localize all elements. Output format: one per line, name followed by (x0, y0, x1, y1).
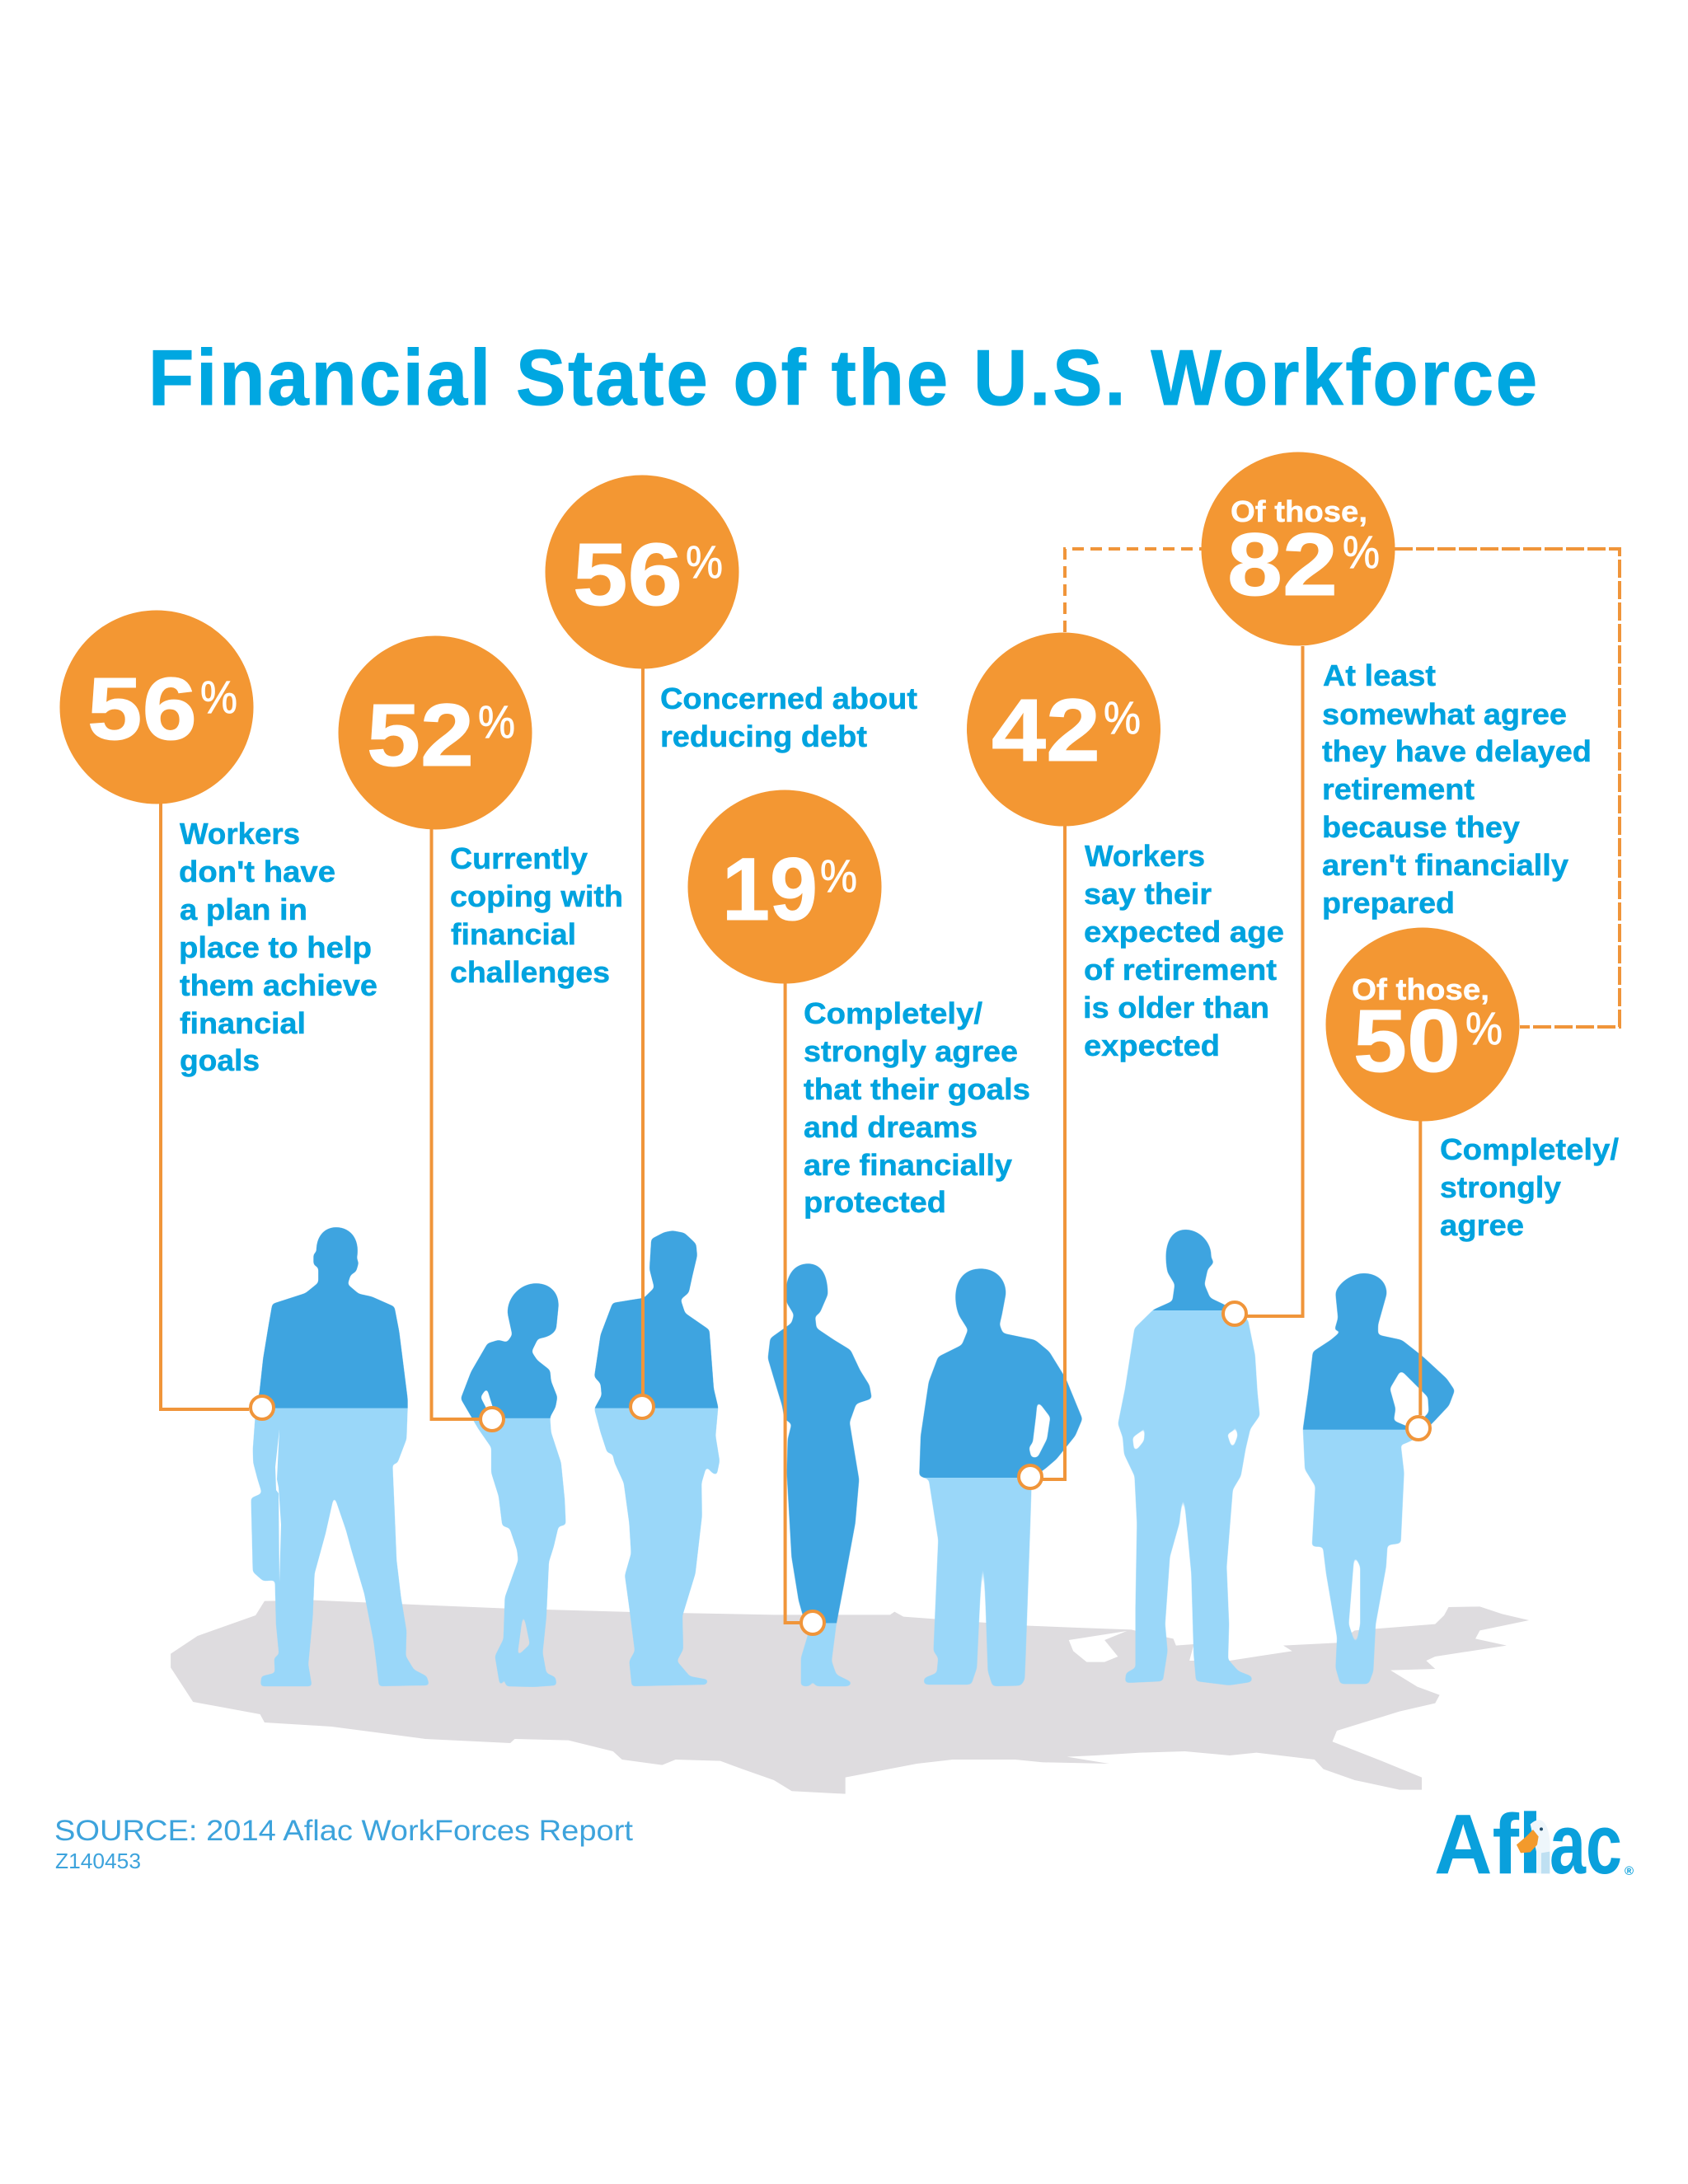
text: coping with challenges: coping with (450, 879, 623, 913)
stat circle: 56% no plan: % (200, 671, 237, 723)
stat circle: 42% (967, 633, 1160, 826)
text: delayed retirement: somewhat agree (1322, 697, 1567, 731)
text: completely agree: strongly (1440, 1170, 1561, 1204)
stat circle: of those 82%: % (1343, 526, 1380, 578)
stat circle: 56% no plan: 56 (87, 658, 197, 758)
text: delayed retirement: prepared (1322, 886, 1455, 920)
text: goals and dreams protected (804, 996, 1030, 1219)
text: goals and dreams protected: that their goals (804, 1072, 1030, 1106)
text: delayed retirement: retirement (1322, 772, 1475, 806)
map: United States (171, 1601, 1529, 1794)
stat circle: 42%: 42 (992, 680, 1100, 780)
text: workers without a plan: don't have (179, 855, 335, 888)
text: delayed retirement: they have delayed (1322, 734, 1592, 768)
text: goals and dreams protected: Completely/ (804, 996, 982, 1030)
stat circle: of those 50%: % (1465, 1002, 1503, 1054)
stat circle: 56% no plan (59, 610, 254, 804)
source note (54, 1815, 633, 1873)
logo: Aflac with duck (1434, 1797, 1634, 1891)
stat circle: of those 82% (1202, 452, 1395, 646)
logo: Aflac with duck: Af (1434, 1797, 1520, 1891)
stat circle: of those 82%: 82 (1227, 514, 1338, 614)
text: workers without a plan: financial (180, 1006, 306, 1040)
text: workers without a plan: them achieve (180, 968, 377, 1002)
text: older retirement age: say their (1084, 877, 1212, 911)
stat circle: 56% debt (546, 475, 738, 669)
dashed connector: 42% to 82% (1065, 549, 1202, 632)
source note: Z140453 (55, 1849, 141, 1873)
stat circle: of those 50%: 50 (1353, 991, 1461, 1090)
stat circle: 19%: 19 (722, 839, 818, 939)
person 6: man, 82% (1118, 1230, 1259, 1685)
stat circle: 52% coping (338, 636, 532, 829)
stat circle: 52% coping: % (478, 696, 515, 748)
text: workers without a plan (179, 817, 377, 1077)
dashed connector: 82% to 50% (1395, 549, 1620, 1027)
text: older retirement age: expected age (1084, 915, 1284, 949)
text: workers without a plan: goals (180, 1043, 260, 1077)
stat circle: of those 82%: Of those, (1231, 494, 1367, 528)
text: workers without a plan: a plan in (180, 893, 307, 926)
stat circle: 19% (687, 790, 882, 984)
icon: duck head (1517, 1811, 1550, 1873)
title: Financial State of the U.S. Workforce (148, 334, 1540, 422)
person 3: man, 56% (594, 1230, 720, 1686)
text: older retirement age: expected (1084, 1029, 1220, 1062)
text: goals and dreams protected: protected (804, 1185, 946, 1219)
stat circle: 19%: % (820, 850, 857, 902)
stat circle: 56% debt: 56 (573, 524, 682, 624)
text: goals and dreams protected: strongly agree (804, 1034, 1018, 1068)
text: coping with challenges: challenges (450, 955, 610, 989)
text: older retirement age: is older than (1083, 991, 1269, 1024)
marker dots (251, 1302, 1430, 1634)
text: coping with challenges: Currently (450, 841, 588, 875)
stat circle: 56% debt: % (686, 536, 723, 588)
stat circle: of those 50%: Of those, (1352, 972, 1489, 1006)
text: completely agree: agree (1440, 1208, 1524, 1242)
stat circle: 52% coping: 52 (367, 685, 474, 785)
text: delayed retirement: aren't financially (1322, 848, 1568, 882)
person 5: man, 42% (919, 1268, 1082, 1686)
stat circle: of those 50% (1325, 928, 1520, 1121)
text: completely agree: Completely/ (1440, 1132, 1619, 1166)
text: coping with challenges: financial (451, 917, 576, 951)
text: coping with challenges (450, 841, 623, 989)
person 1: man with briefcase, 56% (251, 1227, 429, 1686)
text: completely agree (1440, 1132, 1619, 1242)
logo: Aflac with duck: ac (1550, 1797, 1622, 1891)
text: reducing debt: reducing debt (660, 719, 867, 753)
text: workers without a plan: Workers (180, 817, 300, 851)
text: workers without a plan: place to help (179, 930, 372, 964)
person 2: woman, 52% (462, 1283, 565, 1687)
person 7: woman, 50% (1302, 1272, 1454, 1685)
arm gap (275, 1429, 281, 1582)
text: delayed retirement: At least (1323, 658, 1436, 692)
text: reducing debt: Concerned about (660, 682, 917, 715)
logo: Aflac with duck: ® (1625, 1864, 1634, 1878)
callout lines (161, 646, 1420, 1623)
text: delayed retirement (1322, 658, 1592, 920)
text: older retirement age (1083, 839, 1284, 1062)
text: delayed retirement: because they (1322, 810, 1520, 844)
source note: SOURCE: 2014 Aflac WorkForces Report (54, 1815, 633, 1847)
text: older retirement age: of retirement (1084, 953, 1277, 987)
person 4: woman, 19% (768, 1263, 872, 1686)
text: older retirement age: Workers (1085, 839, 1205, 873)
text: reducing debt (660, 682, 917, 753)
stat circle: 42%: % (1104, 691, 1141, 743)
text: goals and dreams protected: are financially (804, 1148, 1012, 1182)
text: goals and dreams protected: and dreams (804, 1110, 978, 1144)
